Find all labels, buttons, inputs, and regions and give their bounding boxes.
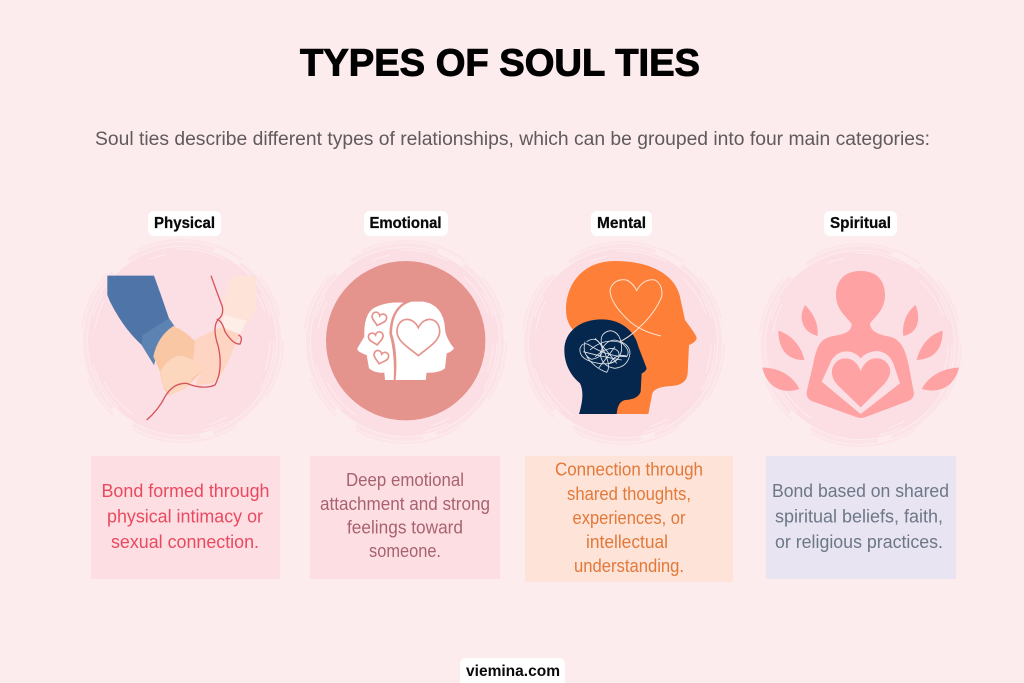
description: emotional: attachment and strong bbox=[320, 494, 490, 514]
label: spiritual bbox=[824, 211, 897, 236]
description: physical bbox=[91, 456, 280, 579]
description: spiritual: spiritual beliefs, faith, bbox=[775, 506, 943, 526]
footer: website bbox=[460, 658, 565, 683]
description: physical: physical intimacy or bbox=[107, 506, 263, 526]
description: spiritual bbox=[766, 456, 956, 579]
label: emotional: Emotional bbox=[370, 215, 442, 232]
description: spiritual: Bond based on shared bbox=[772, 481, 949, 501]
description: mental: intellectual bbox=[586, 532, 668, 552]
description: emotional: Deep emotional bbox=[346, 470, 464, 490]
label: physical: Physical bbox=[154, 215, 215, 232]
icon: two heads with hearts bbox=[326, 261, 485, 420]
icon: two heads, tangled thought becoming heart bbox=[564, 261, 697, 414]
description: mental bbox=[525, 456, 733, 582]
description: emotional: someone. bbox=[369, 541, 441, 561]
background circle: mental bbox=[522, 242, 724, 444]
footer: website: viemina.com bbox=[466, 663, 560, 680]
label: mental: Mental bbox=[597, 215, 646, 232]
panel: physical bbox=[81, 211, 283, 579]
background circle: physical bbox=[81, 240, 283, 442]
description: mental: understanding. bbox=[574, 556, 684, 576]
background circle: spiritual bbox=[759, 244, 961, 446]
label: emotional bbox=[364, 211, 448, 236]
title: TYPES OF SOUL TIES bbox=[300, 42, 700, 84]
description: spiritual: or religious practices. bbox=[775, 532, 943, 552]
panel: mental bbox=[522, 211, 733, 582]
description: mental: experiences, or bbox=[572, 508, 686, 528]
icon: holding hands with red thread bbox=[107, 276, 256, 420]
description: mental: Connection through bbox=[555, 460, 703, 480]
panel: emotional bbox=[304, 211, 506, 579]
intro text: Soul ties describe different types of relationships, which can be grouped into four main categories: bbox=[95, 129, 930, 150]
label: mental bbox=[591, 211, 652, 236]
description: emotional bbox=[310, 456, 500, 579]
description: physical: Bond formed through bbox=[102, 481, 270, 501]
label: physical bbox=[148, 211, 221, 236]
panel: spiritual bbox=[759, 211, 961, 579]
label: spiritual: Spiritual bbox=[830, 215, 891, 232]
background circle: emotional bbox=[304, 241, 506, 443]
description: mental: shared thoughts, bbox=[567, 484, 691, 504]
icon: figure holding a heart with leaves bbox=[762, 271, 959, 418]
description: physical: sexual connection. bbox=[111, 532, 259, 552]
description: emotional: feelings toward bbox=[347, 518, 463, 538]
